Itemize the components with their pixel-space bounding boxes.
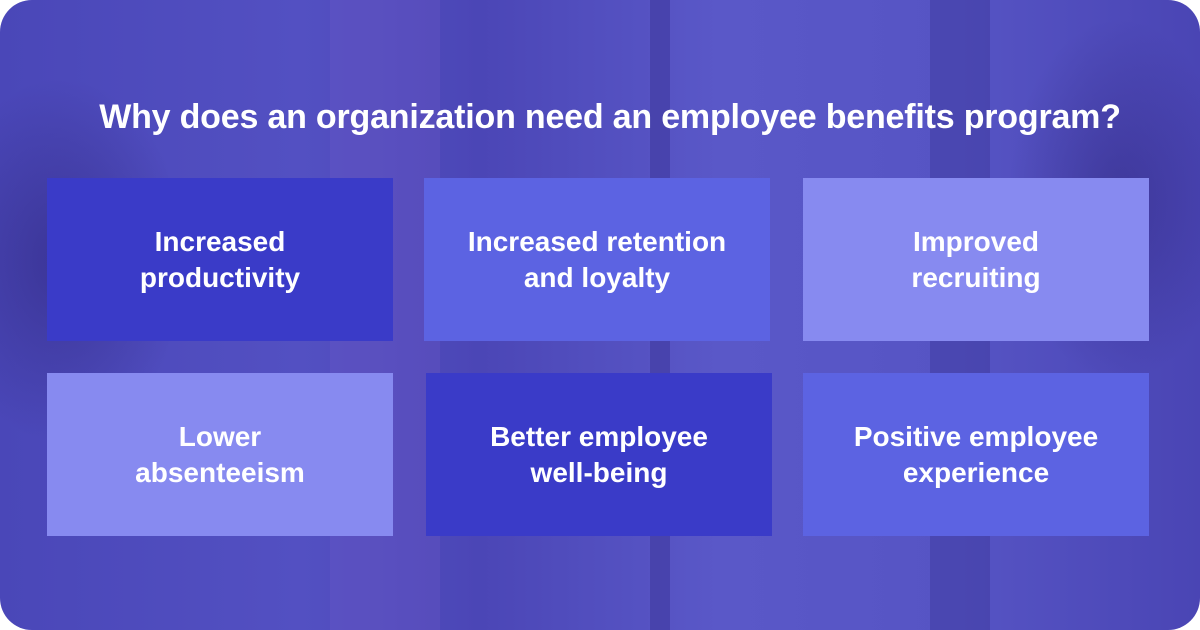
box: positive experience: Positive employee bbox=[854, 420, 1098, 452]
box: improved recruiting: recruiting bbox=[911, 262, 1041, 292]
box: increased productivity bbox=[47, 178, 393, 341]
box: lower absenteeism: absenteeism bbox=[135, 456, 305, 488]
box: increased productivity: productivity bbox=[140, 262, 300, 292]
box: increased retention bbox=[424, 178, 770, 341]
box: positive experience bbox=[803, 373, 1149, 536]
box: better well-being bbox=[426, 373, 772, 536]
box: increased retention: and loyalty bbox=[524, 262, 670, 292]
box: increased productivity: Increased bbox=[155, 226, 285, 256]
box: positive experience: experience bbox=[903, 456, 1049, 488]
box: better well-being: well-being bbox=[531, 456, 667, 488]
title: Why does an organization need an employee benefits program? bbox=[99, 98, 1121, 136]
box: improved recruiting: Improved bbox=[913, 226, 1039, 256]
box: better well-being: Better employee bbox=[490, 420, 708, 452]
box: increased retention: Increased retention bbox=[468, 226, 726, 256]
box: lower absenteeism: Lower bbox=[179, 420, 261, 452]
box: improved recruiting bbox=[803, 178, 1149, 341]
box: lower absenteeism bbox=[47, 373, 393, 536]
